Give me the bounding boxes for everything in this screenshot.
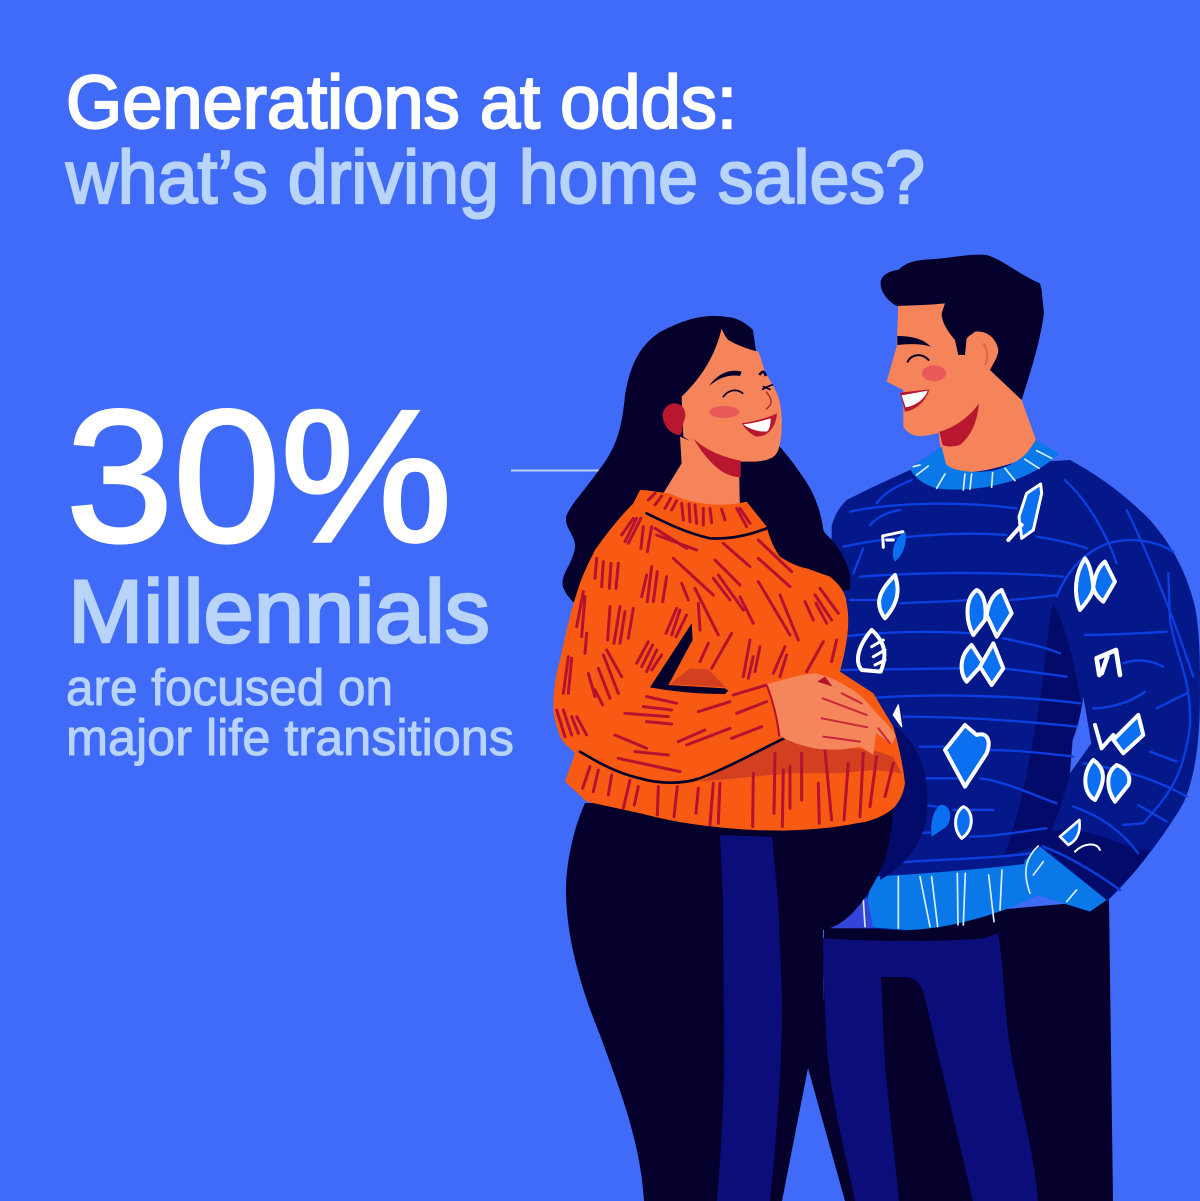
woman's sweater <box>553 490 905 831</box>
description: are focused on <box>66 659 393 716</box>
knit stripes <box>840 480 1193 890</box>
woman's eyebrow <box>709 371 742 386</box>
man's ear <box>968 333 998 367</box>
face <box>887 302 1022 436</box>
description <box>66 659 514 766</box>
title line two: what’s driving home sales? <box>65 135 925 219</box>
woman's ear <box>663 403 685 435</box>
hand on belly <box>767 673 896 755</box>
neck <box>938 383 1036 473</box>
sleeve shadow <box>1003 603 1090 857</box>
arm gap <box>1070 697 1091 773</box>
sweater seam lines <box>580 513 784 783</box>
woman's neck and face <box>663 328 782 513</box>
sweater hem <box>860 863 1038 930</box>
sweater motifs <box>858 484 1143 852</box>
knit dashes <box>557 493 893 827</box>
woman's back hair <box>563 316 850 602</box>
belly shadow on man's sweater <box>880 725 927 880</box>
man's sweater <box>830 460 1200 931</box>
man <box>830 255 1200 931</box>
man's smile <box>900 389 929 412</box>
belly shadow <box>700 738 902 782</box>
man's head <box>881 255 1059 490</box>
generation label: Millennials <box>68 561 490 661</box>
man's eyebrow <box>897 336 931 347</box>
man's blush <box>922 365 946 381</box>
statistic: 30%: 30% <box>66 371 452 581</box>
cuff shadow <box>1043 830 1150 900</box>
jaw shadow <box>939 403 979 446</box>
woman's blush <box>709 406 739 418</box>
woman's smile <box>742 413 777 437</box>
woman's closed eyes <box>723 385 772 397</box>
woman's nose <box>766 392 771 409</box>
man's collar <box>910 440 1059 490</box>
title <box>65 60 925 219</box>
connector line <box>511 470 601 472</box>
woman <box>553 328 927 1201</box>
finger lines <box>822 693 890 743</box>
illustration: couple <box>553 255 1200 1201</box>
chin shadow <box>693 438 741 477</box>
sleeve cuff <box>1024 847 1107 912</box>
man's hair <box>881 255 1044 400</box>
man's closed eye <box>908 355 929 362</box>
man's trousers <box>808 900 1113 1201</box>
trouser centre panel <box>717 835 782 1201</box>
woman's trousers <box>566 803 893 1201</box>
title line one: Generations at odds: <box>66 60 737 144</box>
description: major life transitions <box>66 709 514 766</box>
cuff line <box>767 685 779 737</box>
statistic block <box>66 371 514 766</box>
sleeve gap <box>650 623 728 694</box>
